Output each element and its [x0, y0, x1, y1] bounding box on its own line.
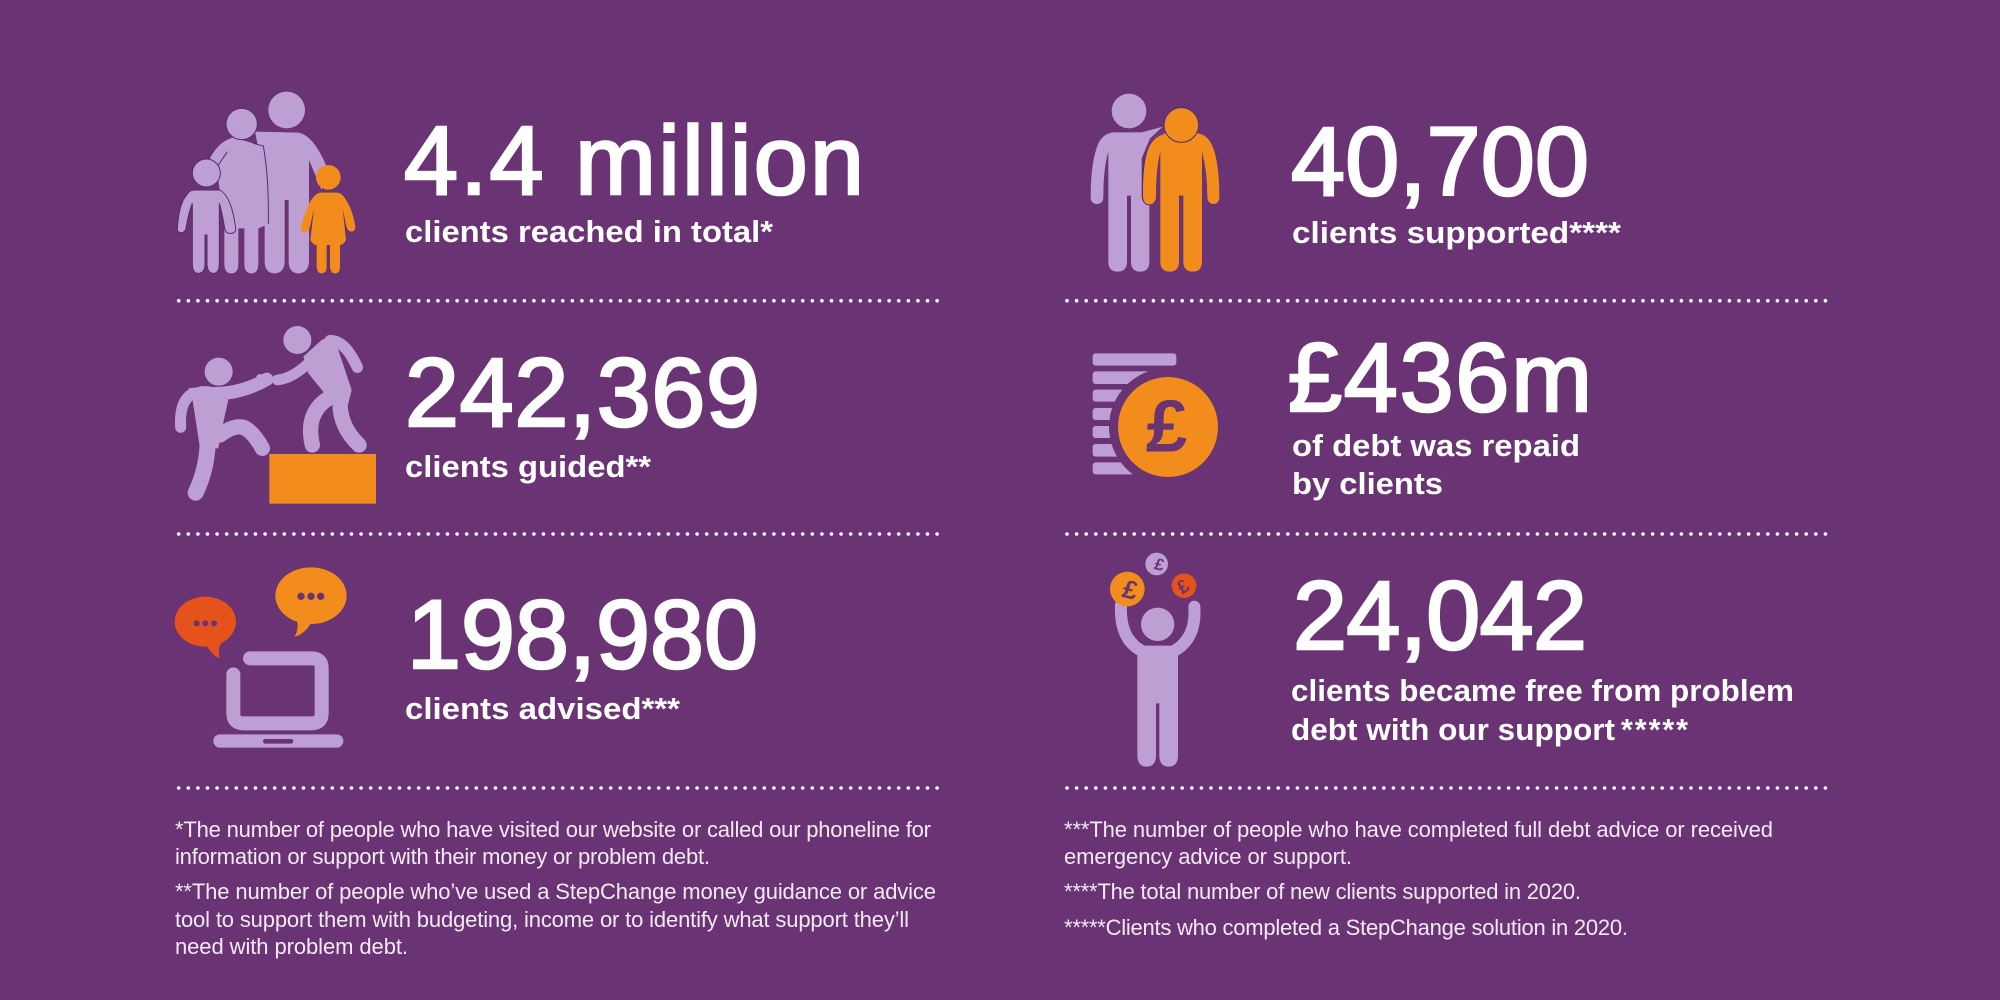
icon: person juggling coins [1110, 553, 1196, 767]
icon: two people, arm around shoulder [1091, 94, 1219, 272]
panel: 24,042 clients free from debt [1110, 553, 1794, 767]
label: clients became free from problem debt: debt with our support [1291, 713, 1615, 747]
label: of debt was repaid by clients: by clients [1292, 467, 1443, 501]
panel: 4.4 million clients reached [177, 92, 864, 273]
panel: 198,980 clients advised [175, 567, 758, 748]
stat: 24,042: 24,042 [1293, 561, 1587, 670]
footnotes: left column: *The number of people who have visited our website or called our phoneline for [175, 817, 931, 842]
icon: person helping another up a step [180, 326, 376, 504]
icon: stack of coins with pound coin [1093, 353, 1227, 486]
label: clients became free from problem debt: clients became free from problem [1291, 674, 1794, 708]
footnotes: right column [1064, 817, 1773, 940]
label: clients became free from problem debt [1291, 674, 1794, 747]
footnotes: right column: ****The total number of new clients supported in 2020. [1064, 879, 1581, 904]
footnotes: right column: emergency advice or support. [1064, 844, 1352, 869]
footnotes: left column: need with problem debt. [175, 934, 408, 959]
label: clients advised: clients advised*** [405, 692, 680, 726]
footnotes: left column: **The number of people who’ve used a StepChange money guidance or advice [175, 879, 936, 904]
stat: 4.4 million: 4.4 million [404, 106, 864, 215]
icon: person juggling coins: £ [1152, 554, 1167, 575]
icon: family of four [177, 92, 355, 273]
icon: person juggling coins: £ [1173, 574, 1194, 598]
icon: laptop with speech bubbles [175, 567, 347, 748]
icon: stack of coins with pound coin: £ [1145, 385, 1190, 468]
stat: £436m: £436m [1288, 323, 1592, 432]
stat: 242,369: 242,369 [405, 338, 760, 447]
panel: 242,369 clients guided [180, 326, 760, 504]
panel: £436m debt repaid [1093, 323, 1592, 501]
stat: 40,700: 40,700 [1291, 107, 1589, 216]
stat: 198,980: 198,980 [407, 580, 758, 689]
label: of debt was repaid by clients [1292, 429, 1580, 501]
footnotes: left column [175, 817, 936, 959]
label: clients supported: clients supported**** [1292, 216, 1621, 250]
footnotes: left column: information or support with their money or problem debt. [175, 844, 710, 869]
footnotes: left column: tool to support them with budgeting, income or to identify what support they’ll [175, 907, 909, 932]
label: clients reached in total: clients reached in total* [405, 215, 773, 249]
label: clients guided: clients guided** [405, 450, 651, 484]
icon: person juggling coins: £ [1119, 573, 1142, 606]
footnotes: right column: *****Clients who completed a StepChange solution in 2020. [1064, 915, 1628, 940]
label: of debt was repaid by clients: of debt was repaid [1292, 429, 1580, 463]
dotted dividers [179, 301, 1826, 788]
panel: 40,700 clients supported [1091, 94, 1621, 272]
footnotes: right column: ***The number of people who have completed full debt advice or received [1064, 817, 1773, 842]
label: clients became free from problem debt: ***** [1621, 713, 1688, 747]
